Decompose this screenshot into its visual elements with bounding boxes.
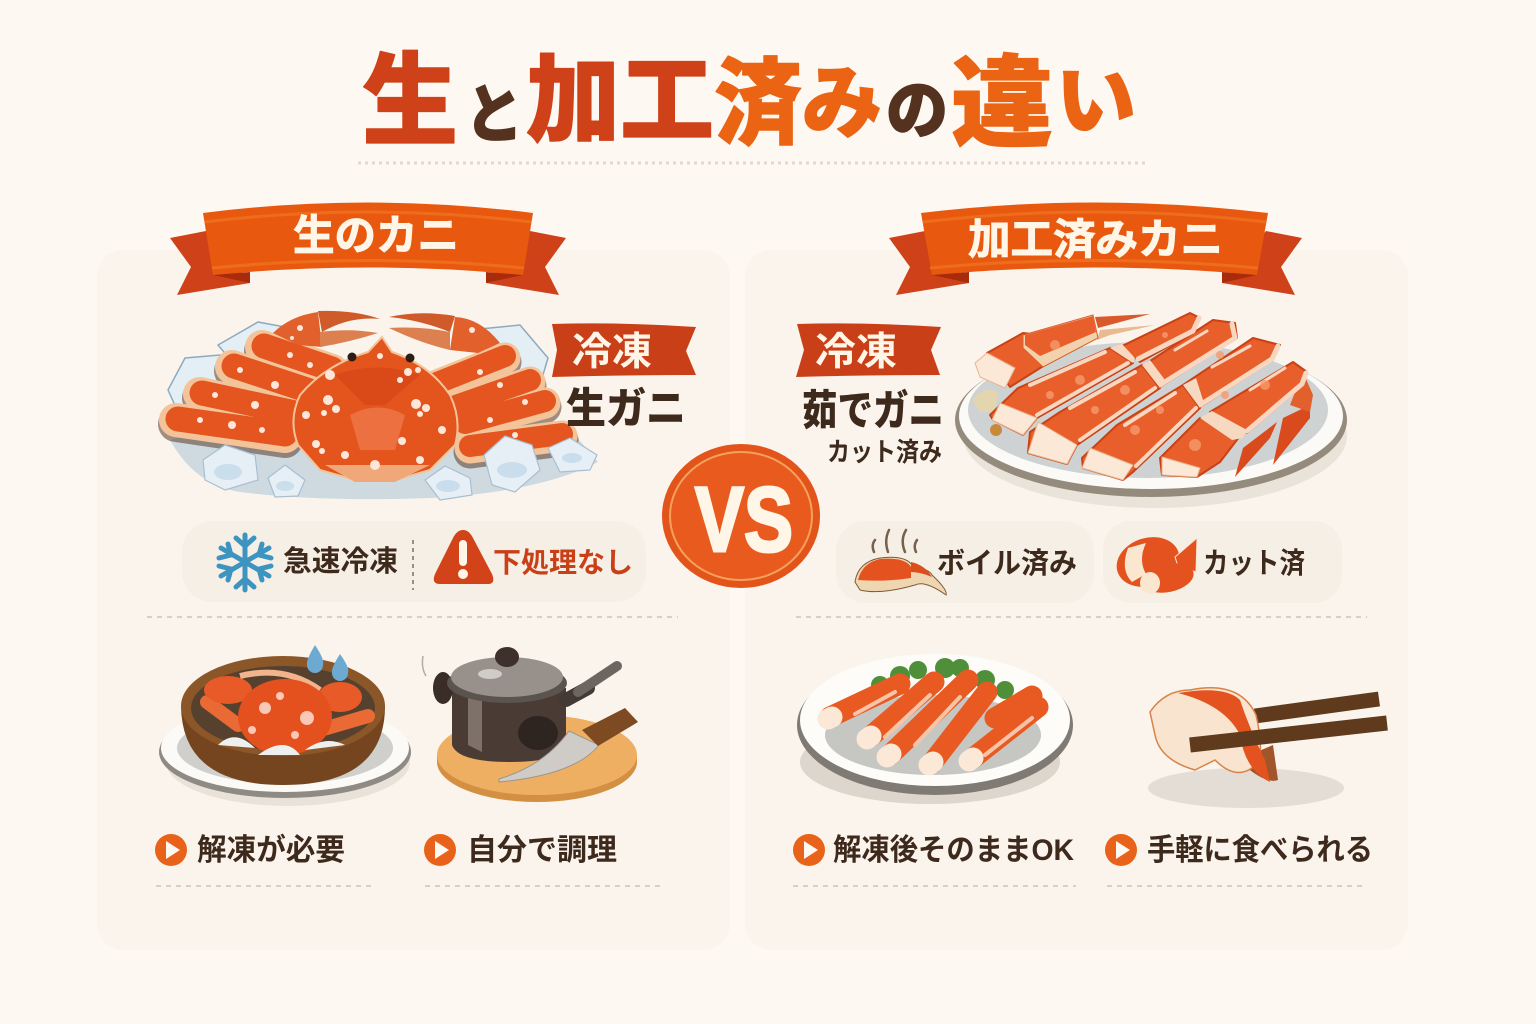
claws	[273, 311, 500, 353]
title: い	[1056, 57, 1136, 145]
meat speckles	[1046, 332, 1270, 451]
small crab	[207, 702, 368, 730]
icon: warning	[434, 530, 493, 584]
text: cut: カット済	[1203, 547, 1305, 580]
label: raw crab: 生ガニ	[566, 385, 686, 432]
icon: cut crab pieces	[1110, 529, 1197, 597]
bullet: needs thawing: 解凍が必要	[197, 833, 345, 867]
title: 加工	[526, 48, 714, 155]
leg upper segments	[1120, 313, 1200, 362]
title: の	[886, 75, 948, 147]
front ice chunks	[203, 436, 597, 500]
frost specks	[197, 325, 528, 470]
label: frozen tag left	[552, 323, 696, 377]
label: frozen tag left: 冷凍	[572, 331, 652, 374]
ice bits	[218, 737, 345, 755]
VS badge	[662, 444, 820, 588]
ribbon: processed crab heading	[889, 202, 1302, 295]
title	[362, 46, 1136, 160]
label: frozen tag right	[796, 323, 941, 377]
bullet: easy to eat: 手軽に食べられる	[1147, 834, 1373, 867]
illustration: cut crab legs on plate	[955, 313, 1347, 508]
illustration: thawing crab in bowl	[159, 645, 411, 806]
leg lower segments	[990, 348, 1133, 435]
pill: cut	[1103, 521, 1342, 603]
joints	[1110, 344, 1135, 363]
knife	[499, 731, 599, 782]
title: 違	[951, 48, 1053, 160]
bowl	[181, 706, 385, 785]
water drops	[307, 645, 323, 673]
claw leg	[987, 333, 1045, 387]
icon: snowflake	[219, 535, 271, 590]
illustration: pot and knife on board	[422, 647, 638, 802]
ice chunks	[168, 322, 548, 420]
cut meat ends	[992, 403, 1037, 435]
title: み	[802, 59, 882, 148]
panel: processed crab background	[745, 250, 1408, 950]
plate	[963, 364, 1347, 508]
icon: steam and claw	[855, 530, 946, 595]
illustration: crab legs on plate	[797, 654, 1073, 804]
ribbon: processed crab heading: 加工済みカニ	[968, 216, 1223, 263]
right legs	[437, 356, 562, 452]
pincers behind	[1095, 314, 1150, 328]
ribbon: raw crab heading: 生のカニ	[293, 212, 459, 259]
label: frozen tag right: 冷凍	[815, 331, 897, 374]
illustration: crab meat with chopsticks	[1148, 688, 1387, 808]
bullet: cook yourself: 自分で調理	[467, 834, 617, 867]
panel: raw crab background	[97, 250, 730, 950]
carapace	[293, 337, 458, 480]
title: と	[465, 79, 523, 151]
label: boiled crab: 茹でガニ	[802, 387, 944, 434]
left legs	[176, 346, 332, 440]
title: 済	[714, 51, 802, 156]
ice shadow	[170, 425, 598, 499]
title: 生	[362, 46, 458, 158]
illustration: frozen whole crab on ice	[168, 311, 598, 500]
label: cut: カット済み	[827, 437, 942, 467]
VS badge: VS	[695, 469, 793, 571]
text: no prep: 下処理なし	[493, 547, 633, 578]
text: flash frozen: 急速冷凍	[283, 545, 398, 578]
pill: boiled	[836, 521, 1094, 603]
greens	[871, 658, 1014, 699]
bullet: ok after thawing: 解凍後そのままOK	[833, 834, 1074, 867]
ribbon: raw crab heading	[170, 202, 566, 295]
text: boiled: ボイル済み	[937, 547, 1077, 580]
pot	[452, 688, 566, 762]
pill: raw crab features	[182, 521, 646, 602]
